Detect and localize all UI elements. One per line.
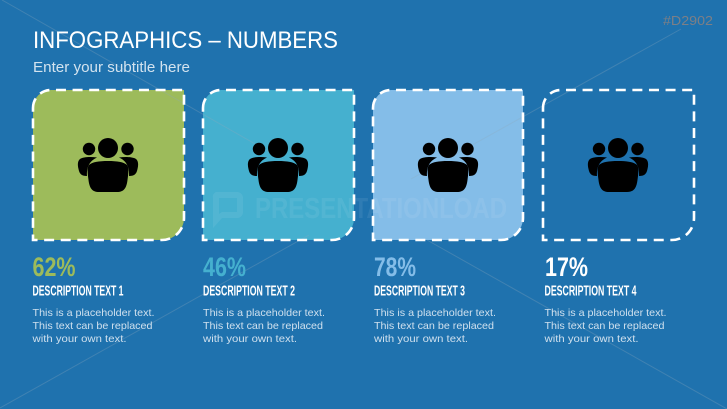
column 1 text xyxy=(31,252,154,345)
column 4 text: with your own text. xyxy=(543,333,638,345)
column 2 text: with your own text. xyxy=(202,333,297,345)
watermark xyxy=(213,192,507,228)
column 3 text: This text can be replaced xyxy=(374,320,494,332)
column 3 text: DESCRIPTION TEXT 3 xyxy=(374,282,465,300)
icon: people 2 xyxy=(248,138,308,192)
column 2 text xyxy=(202,252,325,345)
filled box: light blue xyxy=(373,90,523,240)
column 4 text xyxy=(543,252,666,345)
column 3 text: with your own text. xyxy=(373,333,468,345)
column 4 text: This text can be replaced xyxy=(544,320,665,332)
column 4 text: 17% xyxy=(545,252,588,282)
column 2 text: This is a placeholder text. xyxy=(203,307,325,319)
filled box: teal xyxy=(203,90,354,240)
column 2 text: This text can be replaced xyxy=(203,320,323,332)
column 3 text xyxy=(373,252,496,345)
column 3 text: 78% xyxy=(374,252,416,282)
column 3 text: This is a placeholder text. xyxy=(374,307,496,319)
color code: #D2902 xyxy=(663,13,713,28)
icon: people 4 xyxy=(588,138,648,192)
column 4 text: This is a placeholder text. xyxy=(544,307,666,319)
column 1 text: 62% xyxy=(32,252,76,282)
column 2 text: 46% xyxy=(203,252,246,282)
title: INFOGRAPHICS – NUMBERS xyxy=(33,27,338,54)
column 2 text: DESCRIPTION TEXT 2 xyxy=(203,282,295,300)
dashed outline 1 xyxy=(33,90,184,240)
dashed outline 2 xyxy=(203,90,354,240)
subtitle: Enter your subtitle here xyxy=(33,59,190,76)
column 1 text: with your own text. xyxy=(31,333,126,345)
column 1 text: This text can be replaced xyxy=(32,320,153,332)
column 4 text: DESCRIPTION TEXT 4 xyxy=(544,282,637,300)
watermark: PRESENTATIONLOAD xyxy=(255,193,507,225)
icon: people 1 xyxy=(78,138,138,192)
filled box: green xyxy=(33,90,184,240)
dashed outline 3 xyxy=(373,90,523,240)
column 1 text: DESCRIPTION TEXT 1 xyxy=(32,282,124,300)
icon: people 3 xyxy=(418,138,478,192)
column 1 text: This is a placeholder text. xyxy=(32,307,154,319)
dashed outline 4 xyxy=(543,90,694,240)
